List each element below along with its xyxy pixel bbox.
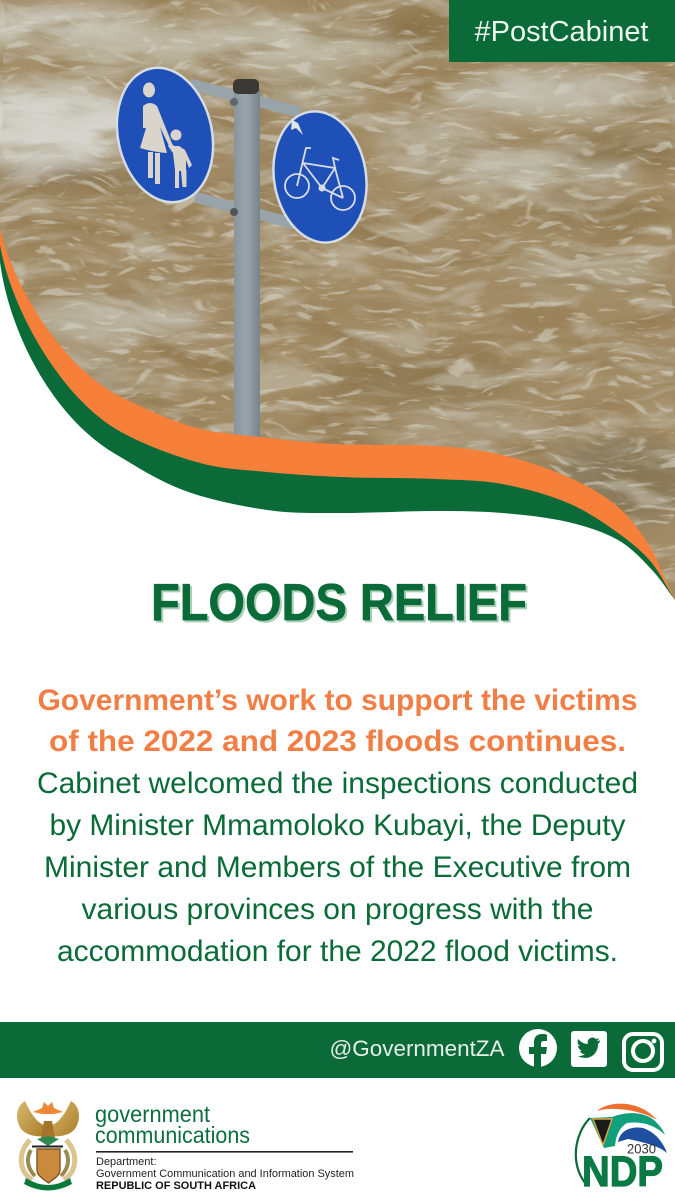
green description: by Minister Mmamoloko Kubayi, the Deputy	[50, 809, 626, 842]
logo: government communications wordmark	[95, 1101, 354, 1192]
green description: Minister and Members of the Executive from	[44, 851, 631, 884]
icon: twitter	[571, 1031, 607, 1067]
logo: government communications wordmark: communications	[95, 1122, 250, 1148]
wings	[17, 1101, 46, 1136]
wave: orange band	[0, 228, 675, 640]
social media bar	[0, 1022, 675, 1078]
side wreaths	[21, 1140, 75, 1180]
green description: Cabinet welcomed the inspections conducted	[37, 767, 638, 800]
logo: government communications wordmark: REPUBLIC OF SOUTH AFRICA	[96, 1180, 256, 1192]
green description: accommodation for the 2022 flood victims.	[57, 935, 618, 968]
green description	[37, 767, 638, 968]
orange lead sentence: of the 2022 and 2023 floods continues.	[49, 725, 626, 758]
spear	[32, 1146, 63, 1148]
hashtag banner: #PostCabinet	[474, 16, 648, 48]
logo: government communications wordmark: government	[95, 1101, 211, 1127]
street sign pole with two mounting arms	[190, 79, 300, 440]
logo: NDP 2030: 2030	[627, 1140, 656, 1156]
icon: round blue pedestrian sign	[105, 59, 225, 211]
title with soft shadow: FLOODS RELIEF	[153, 575, 529, 633]
rising sun	[33, 1102, 63, 1114]
logo: NDP 2030: NDP	[582, 1148, 663, 1196]
wave: green band	[0, 245, 675, 640]
icon: instagram	[624, 1034, 662, 1070]
hashtag banner	[449, 0, 675, 62]
logo: coat of arms	[17, 1101, 79, 1190]
social handle: @GovernmentZA	[330, 1036, 505, 1061]
orange lead sentence	[38, 684, 638, 758]
white lower page	[0, 262, 675, 1200]
body text	[37, 684, 638, 968]
protea crown	[37, 1136, 59, 1146]
title with soft shadow: FLOODS RELIEF	[151, 573, 527, 631]
bird head	[41, 1121, 55, 1138]
icon: facebook	[519, 1029, 557, 1067]
green description: various provinces on progress with the	[82, 893, 594, 926]
orange lead sentence: Government’s work to support the victims	[38, 684, 638, 717]
logo: NDP 2030	[576, 1104, 667, 1196]
motto ribbon	[24, 1178, 72, 1190]
logo: government communications wordmark: Department:	[96, 1156, 157, 1168]
shield	[37, 1149, 60, 1183]
icon: round blue bicycle sign	[264, 105, 376, 249]
photo: flooded brown river water	[0, 0, 675, 600]
logo: government communications wordmark: Government Communication and Information System	[96, 1168, 354, 1180]
